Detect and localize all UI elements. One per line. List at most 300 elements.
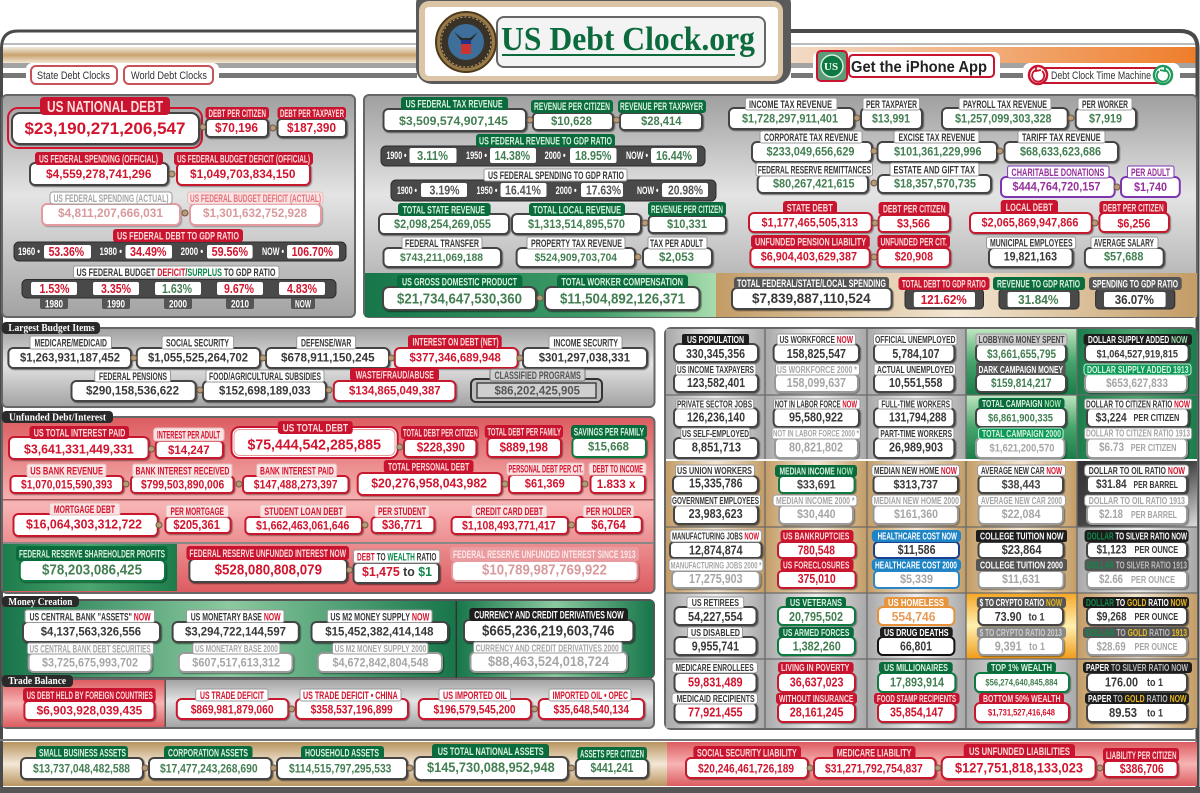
panel: unfunded liabilities band bbox=[667, 739, 1197, 786]
heading: unfunded debt and interest: Unfunded Debt/Interest bbox=[9, 412, 107, 424]
clock: central bank debt securities bbox=[27, 643, 154, 672]
clock: total debt to GDP ratio: TOTAL DEBT TO GDP RATIO bbox=[902, 278, 986, 290]
clock: unfunded per citizen: UNFUNDED PER CIT. bbox=[880, 236, 947, 248]
cell: median income: $33,691 bbox=[797, 478, 836, 492]
clock: tariff tax revenue: $68,633,623,686 bbox=[1020, 144, 1101, 158]
ratio bar: federal revenue to GDP: 14.38% bbox=[494, 148, 530, 163]
clock: total interest paid: $3,641,331,449,331 bbox=[24, 442, 134, 456]
clock: student loan debt bbox=[245, 505, 362, 534]
clock: federal reserve remittances bbox=[756, 163, 872, 193]
cell: millionaires and food stamp recipients bbox=[874, 662, 960, 722]
cell: retirees and disabled: 54,227,554 bbox=[688, 609, 743, 624]
clock: revenue to GDP ratio: 31.84% bbox=[1018, 292, 1059, 307]
cell: average new car bbox=[978, 465, 1066, 524]
cell: veterans and armed forces: US VETERANS bbox=[790, 598, 842, 609]
clock: central bank debt securities: US CENTRAL BANK DEBT SECURITIES bbox=[30, 644, 151, 656]
cell: dollar to citizen ratio: $3,224 bbox=[1096, 410, 1127, 424]
clock: household assets bbox=[277, 746, 407, 779]
clock: currency and credit derivatives now: $665,236,219,603,746 bbox=[482, 622, 614, 640]
cell: dollar to gold ratio: PER OUNCE bbox=[1134, 642, 1178, 653]
clock: savings per family: SAVINGS PER FAMILY bbox=[574, 426, 644, 438]
cell: dollar to citizen ratio: $6.73 bbox=[1099, 440, 1124, 454]
cell: millionaires and food stamp recipients: 35,854,147 bbox=[890, 704, 943, 720]
clock: estate and gift tax: ESTATE AND GIFT TAX bbox=[894, 164, 975, 176]
clock: per student: PER STUDENT bbox=[378, 506, 426, 518]
cell: dollar to gold ratio: DOLLAR TO GOLD RATIO NOW bbox=[1086, 598, 1187, 609]
clock: debt held by foreign countries: $6,903,928,039,435 bbox=[37, 704, 143, 718]
clock: property tax revenue: PROPERTY TAX REVENUE bbox=[531, 238, 622, 250]
ratio bar: federal revenue to GDP: 16.44% bbox=[656, 148, 692, 163]
cell: dollar to gold ratio: PER OUNCE bbox=[1134, 612, 1178, 623]
clock: total worker compensation bbox=[545, 275, 700, 310]
cell: US population and income taxpayers: 330,345,356 bbox=[686, 346, 745, 361]
cell: dollar to oil ratio: $2.18 bbox=[1099, 507, 1123, 521]
clock: state debt bbox=[749, 201, 872, 232]
clock: federal reserve unfunded interest now bbox=[186, 546, 349, 582]
clock: federal spending actual: $4,811,207,666,031 bbox=[58, 206, 163, 220]
nav: debt clock time machine: Debt Clock Time Machine bbox=[1051, 70, 1151, 82]
cell: average new car: $22,084 bbox=[1002, 507, 1041, 521]
cell: median new home: $161,360 bbox=[894, 507, 938, 521]
cell: union workers and government employees bbox=[671, 465, 760, 524]
clock: total debt per citizen: TOTAL DEBT PER CITIZEN bbox=[403, 428, 478, 440]
ratio bar: federal spending to GDP: 20.98% bbox=[668, 182, 703, 198]
panel: national assets band bbox=[0, 739, 1200, 793]
clock: mortgage debt bbox=[14, 503, 158, 536]
clock: tax per adult: $2,053 bbox=[659, 250, 694, 264]
ratio bar: budget deficit surplus to GDP: 3.35% bbox=[101, 281, 131, 296]
clock: trade deficit: US TRADE DEFICIT bbox=[200, 690, 264, 702]
clock: total debt per family: $889,198 bbox=[500, 440, 548, 454]
clock: revenue per taxpayer bbox=[618, 100, 706, 130]
clock: revenue per citizen bbox=[531, 100, 613, 130]
clock: credit card debt: $1,108,493,771,417 bbox=[462, 518, 556, 532]
clock: total local revenue: TOTAL LOCAL REVENUE bbox=[533, 204, 621, 216]
cell: top 1 percent and bottom 50 percent wealth: TOP 1% WEALTH bbox=[991, 663, 1052, 674]
clock: US unfunded liabilities: $127,751,818,133,023 bbox=[955, 760, 1083, 776]
cell: college tuition bbox=[976, 530, 1067, 588]
nav: get the iPhone app bbox=[813, 51, 1000, 83]
panel: trade balance bbox=[2, 675, 654, 728]
clock: bank interest paid bbox=[243, 464, 348, 493]
clock: bank revenue bbox=[10, 464, 123, 493]
ratio bar: federal debt to GDP: 59.56% bbox=[212, 244, 248, 259]
clock: social security: SOCIAL SECURITY bbox=[166, 338, 229, 350]
clock: trade deficit china: US TRADE DEFICIT • CHINA bbox=[303, 690, 398, 702]
clock: US unfunded liabilities: US UNFUNDED LIABILITIES bbox=[969, 746, 1070, 758]
cell: not in labor force: 80,821,802 bbox=[789, 440, 843, 454]
cell: lobbying and dark campaign money: $159,814,217 bbox=[991, 376, 1052, 390]
cell: homeless and drug deaths: US HOMELESS bbox=[888, 598, 944, 609]
clock: revenue to GDP ratio: REVENUE TO GDP RATIO bbox=[997, 278, 1080, 290]
clock: interest per adult bbox=[154, 428, 224, 458]
clock: debt held by foreign countries: US DEBT HELD BY FOREIGN COUNTRIES bbox=[26, 690, 153, 702]
clock: federal tax revenue bbox=[384, 97, 526, 131]
clock: municipal employees: 19,821,163 bbox=[1004, 250, 1057, 264]
clock: tax per adult bbox=[643, 237, 712, 267]
cell: private sector jobs and self employed: 8,851,713 bbox=[692, 440, 741, 454]
icon: US seal bbox=[436, 12, 496, 72]
clock: interest on debt net: $377,346,689,948 bbox=[410, 350, 501, 364]
ratio bar: budget deficit surplus to GDP: 1.63% bbox=[162, 281, 192, 296]
ratio bar: federal revenue to GDP: NOW • bbox=[626, 150, 648, 162]
ratio bar: budget deficit surplus to GDP: 1990 bbox=[107, 298, 125, 310]
clock: debt to income bbox=[589, 463, 646, 493]
clock: federal budget deficit actual: $1,301,632,752,928 bbox=[203, 206, 307, 220]
clock: total national assets: US TOTAL NATIONAL ASSETS bbox=[438, 746, 544, 758]
clock: state debt per citizen: $3,566 bbox=[897, 216, 930, 230]
cell: college tuition: COLLEGE TUITION 2000 bbox=[980, 560, 1063, 572]
clock: income tax revenue bbox=[729, 98, 854, 129]
clock: federal transfer: $743,211,069,188 bbox=[400, 252, 483, 264]
cell: retirees and disabled bbox=[674, 597, 756, 655]
ratio bar: federal debt to GDP: 2000 • bbox=[181, 246, 203, 258]
cell: full time and part time workers: 131,794,288 bbox=[889, 410, 946, 424]
clock: income security: INCOME SECURITY bbox=[554, 338, 618, 350]
clock: total federal state local spending: TOTAL FEDERAL/STATE/LOCAL SPENDING bbox=[737, 278, 886, 290]
cell: top 1 percent and bottom 50 percent wealth bbox=[975, 662, 1069, 722]
clock: medicare medicaid: MEDICARE/MEDICAID bbox=[34, 338, 107, 350]
clock: payroll tax revenue bbox=[942, 98, 1068, 129]
clock: per holder: $6,764 bbox=[591, 517, 626, 532]
clock: monetary base now: US MONETARY BASE NOW bbox=[191, 612, 281, 624]
cell: bankruptcies and foreclosures bbox=[778, 530, 856, 588]
clock: imported oil: US IMPORTED OIL bbox=[443, 690, 507, 702]
cell: lobbying and dark campaign money: DARK CAMPAIGN MONEY bbox=[978, 365, 1063, 376]
cell: dollar to citizen ratio bbox=[1085, 399, 1192, 458]
clock: revenue per citizen, state and local: $10,331 bbox=[667, 217, 707, 231]
cell: full time and part time workers: 26,989,903 bbox=[889, 440, 943, 454]
cell: paper to silver and gold ratio: 89.53 bbox=[1109, 705, 1137, 720]
ratio bar: budget deficit surplus to GDP bbox=[22, 266, 336, 310]
cell: lobbying and dark campaign money: LOBBYING MONEY SPENT bbox=[978, 335, 1064, 346]
clock: medicare medicaid bbox=[8, 336, 131, 368]
clock: M2 money supply now bbox=[312, 610, 448, 642]
cell: dollar to citizen ratio: PER CITIZEN bbox=[1131, 443, 1176, 454]
cell: average new car: $38,443 bbox=[1002, 478, 1041, 492]
ratio bar: federal revenue to GDP: US FEDERAL REVENUE TO GDP RATIO bbox=[479, 136, 612, 148]
clock: defense war: DEFENSE/WAR bbox=[301, 338, 351, 350]
cell: US population and income taxpayers bbox=[674, 334, 758, 392]
clock: debt per taxpayer: DEBT PER TAXPAYER bbox=[280, 108, 344, 120]
cell: official and actual unemployed: OFFICIAL UNEMPLOYED bbox=[875, 335, 956, 346]
cell: total campaign: $6,861,900,335 bbox=[988, 412, 1053, 424]
nav: state and world debt clocks: State Debt Clocks bbox=[37, 70, 110, 82]
cell: union workers and government employees: GOVERNMENT EMPLOYEES bbox=[672, 496, 759, 507]
cell: retirees and disabled: US RETIREES bbox=[692, 598, 739, 609]
clock: federal reserve unfunded interest now: FEDERAL RESERVE UNFUNDED INTEREST NOW bbox=[189, 548, 346, 560]
clock: per holder: PER HOLDER bbox=[586, 506, 631, 518]
clock: US unfunded liabilities bbox=[942, 744, 1096, 779]
cell: official and actual unemployed: 10,551,558 bbox=[889, 375, 942, 390]
clock: currency and credit derivatives now bbox=[464, 608, 633, 642]
cell: total campaign: TOTAL CAMPAIGN 2000 bbox=[982, 429, 1061, 440]
clock: per adult bbox=[1121, 166, 1180, 197]
clock: food agricultural subsidies: FOOD/AGRICULTURAL SUBSIDIES bbox=[209, 371, 321, 383]
cell: homeless and drug deaths bbox=[878, 597, 954, 655]
clock: imported oil OPEC bbox=[539, 689, 644, 719]
clock: imported oil bbox=[419, 689, 531, 719]
clock: total local revenue bbox=[512, 203, 641, 234]
cell: veterans and armed forces bbox=[778, 597, 855, 655]
clock: total debt per family: TOTAL DEBT PER FAMILY bbox=[487, 426, 561, 438]
clock: bank revenue: US BANK REVENUE bbox=[30, 466, 103, 478]
cell: official and actual unemployed: ACTUAL UNEMPLOYED bbox=[877, 365, 954, 376]
clock: currency and credit derivatives now: CURRENCY AND CREDIT DERIVATIVES NOW bbox=[474, 610, 624, 622]
clock: food agricultural subsidies: $152,698,189,033 bbox=[219, 384, 311, 398]
cell: private sector jobs and self employed: PRIVATE SECTOR JOBS bbox=[677, 400, 752, 410]
clock: property tax revenue bbox=[517, 237, 635, 267]
ratio bar: federal revenue to GDP bbox=[381, 134, 705, 166]
clock: trade deficit china: $358,537,196,899 bbox=[311, 702, 393, 716]
clock: liability per citizen: $386,706 bbox=[1120, 761, 1164, 776]
cell: bankruptcies and foreclosures: US BANKRUPTCIES bbox=[783, 532, 850, 542]
clock: total federal state local spending: $7,839,887,110,524 bbox=[752, 290, 871, 306]
clock: total debt to GDP ratio: 121.62% bbox=[921, 292, 967, 307]
cell: workforce now and 2000: US WORKFORCE NOW bbox=[780, 335, 853, 346]
clock: trade deficit bbox=[177, 689, 288, 719]
clock: per adult: $1,740 bbox=[1134, 180, 1167, 194]
cell: dollar to crypto ratio: $ TO CRYPTO RATIO NOW bbox=[980, 598, 1062, 609]
clock: total interest paid: US TOTAL INTEREST PAID bbox=[34, 428, 125, 440]
clock: monetary base 2000 bbox=[179, 643, 292, 672]
clock: federal pensions: $290,158,536,622 bbox=[86, 384, 179, 398]
cell: retirees and disabled: 9,955,741 bbox=[692, 638, 739, 654]
cell: official and actual unemployed bbox=[874, 334, 957, 392]
clock: tariff tax revenue bbox=[1004, 131, 1118, 162]
clock: US national debt: US NATIONAL DEBT bbox=[47, 99, 163, 116]
clock: federal reserve unfunded interest since 1913: FEDERAL RESERVE UNFUNDED INTEREST SINCE 1913 bbox=[453, 549, 636, 561]
cell: dollar to oil ratio: $31.84 bbox=[1096, 477, 1127, 491]
cell: US population and income taxpayers: 123,582,401 bbox=[687, 375, 745, 390]
clock: state debt: $1,177,465,505,313 bbox=[762, 216, 858, 230]
clock: small business assets: SMALL BUSINESS ASSETS bbox=[39, 748, 126, 760]
cell: living in poverty and without insurance: 36,637,023 bbox=[790, 674, 844, 690]
clock: total worker compensation: $11,504,892,126,371 bbox=[560, 290, 685, 308]
cell: manufacturing jobs: 12,874,874 bbox=[689, 542, 743, 558]
cell: median income bbox=[773, 465, 857, 524]
clock: municipal employees: MUNICIPAL EMPLOYEES bbox=[990, 238, 1073, 250]
clock: imported oil OPEC: $35,648,540,134 bbox=[554, 702, 629, 716]
cell: paper to silver and gold ratio: to 1 bbox=[1147, 708, 1163, 720]
cell: bankruptcies and foreclosures: US FORECLOSURES bbox=[783, 560, 850, 572]
cell: healthcare cost: $5,339 bbox=[900, 572, 933, 586]
clock: unfunded per citizen: $20,908 bbox=[895, 250, 933, 264]
cell: living in poverty and without insurance: WITHOUT INSURANCE bbox=[779, 694, 854, 705]
cell: total campaign: TOTAL CAMPAIGN NOW bbox=[982, 399, 1061, 410]
cell: dollar to silver ratio: $2.66 bbox=[1099, 572, 1123, 586]
clock: bank interest received bbox=[131, 464, 234, 493]
cell: workforce now and 2000 bbox=[774, 334, 860, 392]
clock: state debt: STATE DEBT bbox=[787, 202, 833, 214]
clock: central bank assets now bbox=[23, 610, 160, 642]
cell: college tuition: $23,864 bbox=[1002, 542, 1042, 557]
cell: average new car: AVERAGE NEW CAR NOW bbox=[981, 466, 1062, 477]
cell: retirees and disabled: US DISABLED bbox=[691, 628, 740, 639]
ratio bar: federal spending to GDP: 1950 • bbox=[476, 185, 498, 197]
clock: income security: $301,297,038,331 bbox=[539, 350, 630, 364]
ratio bar: budget deficit surplus to GDP: 1980 bbox=[45, 298, 63, 310]
cell: dollar to oil ratio: DOLLAR TO OIL RATIO NOW bbox=[1089, 466, 1185, 477]
clock: average salary: $57,688 bbox=[1104, 250, 1144, 264]
clock: assets per citizen bbox=[576, 747, 648, 778]
clock: US total debt bbox=[232, 421, 398, 458]
clock: interest on debt net: INTEREST ON DEBT (NET) bbox=[412, 336, 499, 348]
clock: revenue per taxpayer: $28,414 bbox=[641, 114, 682, 128]
clock: corporation assets: CORPORATION ASSETS bbox=[168, 748, 248, 760]
clock: federal budget deficit official: US FEDERAL BUDGET DEFICIT (OFFICIAL) bbox=[177, 154, 310, 166]
clock: federal reserve shareholder profits bbox=[16, 546, 168, 581]
clock: per holder bbox=[576, 505, 642, 533]
clock: currency and credit derivatives 2000: CURRENCY AND CREDIT DERIVATIVES 2000 bbox=[476, 644, 619, 654]
clock: central bank assets now: US CENTRAL BANK "ASSETS" NOW bbox=[30, 612, 151, 624]
clock: corporation assets bbox=[149, 746, 272, 779]
cell: healthcare cost: HEALTHCARE COST NOW bbox=[878, 532, 957, 542]
clock: monetary base 2000: $607,517,613,312 bbox=[192, 656, 280, 670]
clock: credit card debt bbox=[452, 505, 568, 534]
clock: M2 money supply 2000 bbox=[318, 643, 442, 672]
ratio bar: federal revenue to GDP: 2000 • bbox=[545, 150, 566, 162]
clock: total national assets: $145,730,088,952,948 bbox=[427, 759, 555, 775]
clock: medicare liability: $31,271,792,754,837 bbox=[825, 762, 923, 776]
clock: total local revenue: $1,313,514,895,570 bbox=[528, 217, 625, 231]
clock: federal spending actual bbox=[42, 192, 180, 225]
clock: interest per adult: INTEREST PER ADULT bbox=[157, 430, 220, 442]
cell: living in poverty and without insurance bbox=[776, 662, 857, 722]
clock: debt to wealth ratio bbox=[354, 550, 440, 583]
clock: revenue per citizen, state and local: REVENUE PER CITIZEN bbox=[651, 204, 723, 216]
clock: local debt: LOCAL DEBT bbox=[1006, 202, 1053, 214]
clock: revenue per citizen: $10,628 bbox=[551, 114, 592, 128]
clock: per taxpayer: PER TAXPAYER bbox=[866, 99, 917, 111]
clock: classified programs: CLASSIFIED PROGRAMS bbox=[494, 370, 581, 382]
clock: monetary base now: $3,294,722,144,597 bbox=[185, 624, 286, 638]
cell: median income: MEDIAN INCOME NOW bbox=[780, 466, 853, 478]
clock: social security: $1,055,525,264,702 bbox=[148, 350, 248, 364]
ratio bar: federal spending to GDP bbox=[391, 169, 716, 201]
clock: income tax revenue: INCOME TAX REVENUE bbox=[749, 99, 832, 111]
clock: gross domestic product: $21,734,647,530,360 bbox=[397, 290, 522, 308]
cell: dollar supply added bbox=[1084, 334, 1192, 392]
cell: dollar to crypto ratio: to 1 bbox=[1029, 641, 1045, 653]
panel: US population and economy grid bbox=[665, 328, 1197, 729]
cell: not in labor force bbox=[772, 399, 860, 458]
clock: federal budget deficit official: $1,049,703,834,150 bbox=[190, 167, 296, 181]
clock: federal transfer bbox=[384, 237, 501, 267]
ratio bar: federal spending to GDP: US FEDERAL SPENDING TO GDP RATIO bbox=[488, 170, 624, 182]
clock: federal pensions: FEDERAL PENSIONS bbox=[99, 371, 167, 383]
nav: state and world debt clocks: World Debt Clocks bbox=[131, 70, 207, 82]
clock: US total debt: US TOTAL DEBT bbox=[283, 422, 348, 434]
clock: federal spending actual: US FEDERAL SPENDING (ACTUAL) bbox=[54, 193, 169, 205]
clock: total personal debt: $20,276,958,043,982 bbox=[371, 476, 487, 490]
clock: total debt per citizen bbox=[401, 426, 479, 457]
cell: lobbying and dark campaign money bbox=[976, 334, 1067, 392]
cell: top 1 percent and bottom 50 percent wealth: $1,731,527,416,648 bbox=[988, 708, 1055, 718]
clock: debt to wealth ratio: $1,475 to $1 bbox=[362, 564, 432, 579]
cell: manufacturing jobs: MANUFACTURING JOBS NOW bbox=[672, 532, 759, 542]
clock: federal transfer: FEDERAL TRANSFER bbox=[405, 238, 479, 250]
clock: per mortgage: PER MORTGAGE bbox=[170, 506, 224, 518]
cell: paper to silver and gold ratio bbox=[1083, 662, 1192, 722]
clock: state debt per citizen: DEBT PER CITIZEN bbox=[883, 204, 946, 216]
clock: central bank assets now: $4,137,563,326,556 bbox=[41, 624, 141, 638]
cell: veterans and armed forces: 1,382,260 bbox=[793, 638, 841, 654]
panel: federal revenue, state and local bbox=[364, 95, 1197, 317]
ratio bar: federal revenue to GDP: 18.95% bbox=[575, 148, 612, 163]
ratio bar: federal debt to GDP bbox=[14, 229, 346, 261]
cell: medicare and medicaid enrollment: 59,831,489 bbox=[688, 674, 743, 690]
cell: college tuition: $11,631 bbox=[1002, 572, 1040, 586]
nav: debt clock time machine bbox=[1023, 63, 1180, 88]
ratio bar: federal debt to GDP: 106.70% bbox=[292, 244, 333, 259]
clock: unfunded pension liability: $6,904,403,629,387 bbox=[761, 250, 857, 264]
cell: full time and part time workers bbox=[874, 399, 954, 458]
cell: top 1 percent and bottom 50 percent wealth: BOTTOM 50% WEALTH bbox=[983, 694, 1060, 705]
cell: dollar to oil ratio: PER BARREL bbox=[1134, 480, 1178, 491]
cell: not in labor force: NOT IN LABOR FORCE 2000 * bbox=[773, 428, 859, 438]
cell: US population and income taxpayers: US INCOME TAXPAYERS bbox=[677, 365, 754, 376]
cell: medicare and medicaid enrollment bbox=[672, 662, 758, 722]
cell: median income: $30,440 bbox=[797, 507, 836, 521]
ratio bar: federal spending to GDP: 3.19% bbox=[430, 182, 460, 198]
cell: workforce now and 2000: 158,099,637 bbox=[787, 375, 846, 390]
clock: US total debt: $75,444,542,285,885 bbox=[248, 436, 381, 454]
clock: savings per family bbox=[571, 425, 647, 457]
cell: paper to silver and gold ratio: 176.00 bbox=[1105, 674, 1138, 690]
clock: total federal state local spending bbox=[732, 277, 892, 309]
ratio bar: federal debt to GDP: 1980 • bbox=[100, 246, 122, 258]
ratio bar: federal revenue to GDP: 1950 • bbox=[466, 150, 487, 162]
panel: national debt bbox=[2, 95, 355, 317]
title text: US Debt Clock.org bbox=[501, 21, 755, 58]
ratio bar: federal debt to GDP: 34.49% bbox=[130, 244, 167, 259]
clock: trade deficit: $869,981,879,060 bbox=[191, 702, 274, 716]
ratio bar: federal spending to GDP: 1900 • bbox=[397, 185, 417, 197]
ratio bar: federal revenue to GDP: 1900 • bbox=[386, 150, 407, 162]
cell: living in poverty and without insurance: 28,161,245 bbox=[790, 704, 844, 720]
clock: federal spending official bbox=[30, 152, 168, 185]
cell: medicare and medicaid enrollment: MEDICARE ENROLLEES bbox=[676, 663, 754, 674]
cell: median new home: MEDIAN NEW HOME NOW bbox=[874, 466, 957, 477]
clock: charitable donations: $444,764,720,157 bbox=[1012, 180, 1101, 194]
cell: bankruptcies and foreclosures: 780,548 bbox=[798, 542, 835, 558]
clock: medicare medicaid: $1,263,931,187,452 bbox=[20, 350, 120, 364]
cell: millionaires and food stamp recipients: US MILLIONAIRES bbox=[884, 663, 948, 674]
cell: manufacturing jobs: MANUFACTURING JOBS 2000 * bbox=[670, 560, 762, 570]
nav: get the iPhone app: Get the iPhone App bbox=[851, 59, 987, 76]
clock: M2 money supply 2000: $4,672,842,804,548 bbox=[332, 656, 429, 670]
cell: not in labor force: NOT IN LABOR FORCE NOW bbox=[775, 400, 857, 410]
clock: assets per citizen: $441,241 bbox=[590, 760, 633, 775]
cell: private sector jobs and self employed: 126,236,140 bbox=[687, 410, 745, 424]
clock: per taxpayer bbox=[861, 98, 922, 129]
cell: private sector jobs and self employed: US SELF-EMPLOYED bbox=[682, 429, 749, 440]
cell: healthcare cost: HEALTHCARE COST 2000 bbox=[875, 560, 957, 572]
clock: total worker compensation: TOTAL WORKER COMPENSATION bbox=[561, 276, 683, 288]
clock: estate and gift tax bbox=[878, 163, 991, 193]
clock: total interest paid bbox=[9, 426, 149, 459]
clock: M2 money supply now: $15,452,382,414,148 bbox=[325, 624, 434, 638]
cell: dollar to crypto ratio: 9,391 bbox=[995, 638, 1022, 654]
cell: homeless and drug deaths: US DRUG DEATHS bbox=[884, 628, 949, 639]
clock: federal spending official: US FEDERAL SPENDING (OFFICIAL) bbox=[39, 154, 158, 166]
nav: get the iPhone app: US bbox=[824, 61, 838, 73]
clock: income security bbox=[523, 336, 647, 368]
ratio bar: budget deficit surplus to GDP: 9.67% bbox=[224, 281, 254, 296]
clock: credit card debt: CREDIT CARD DEBT bbox=[476, 506, 543, 518]
cell: manufacturing jobs: 17,275,903 bbox=[689, 571, 743, 586]
